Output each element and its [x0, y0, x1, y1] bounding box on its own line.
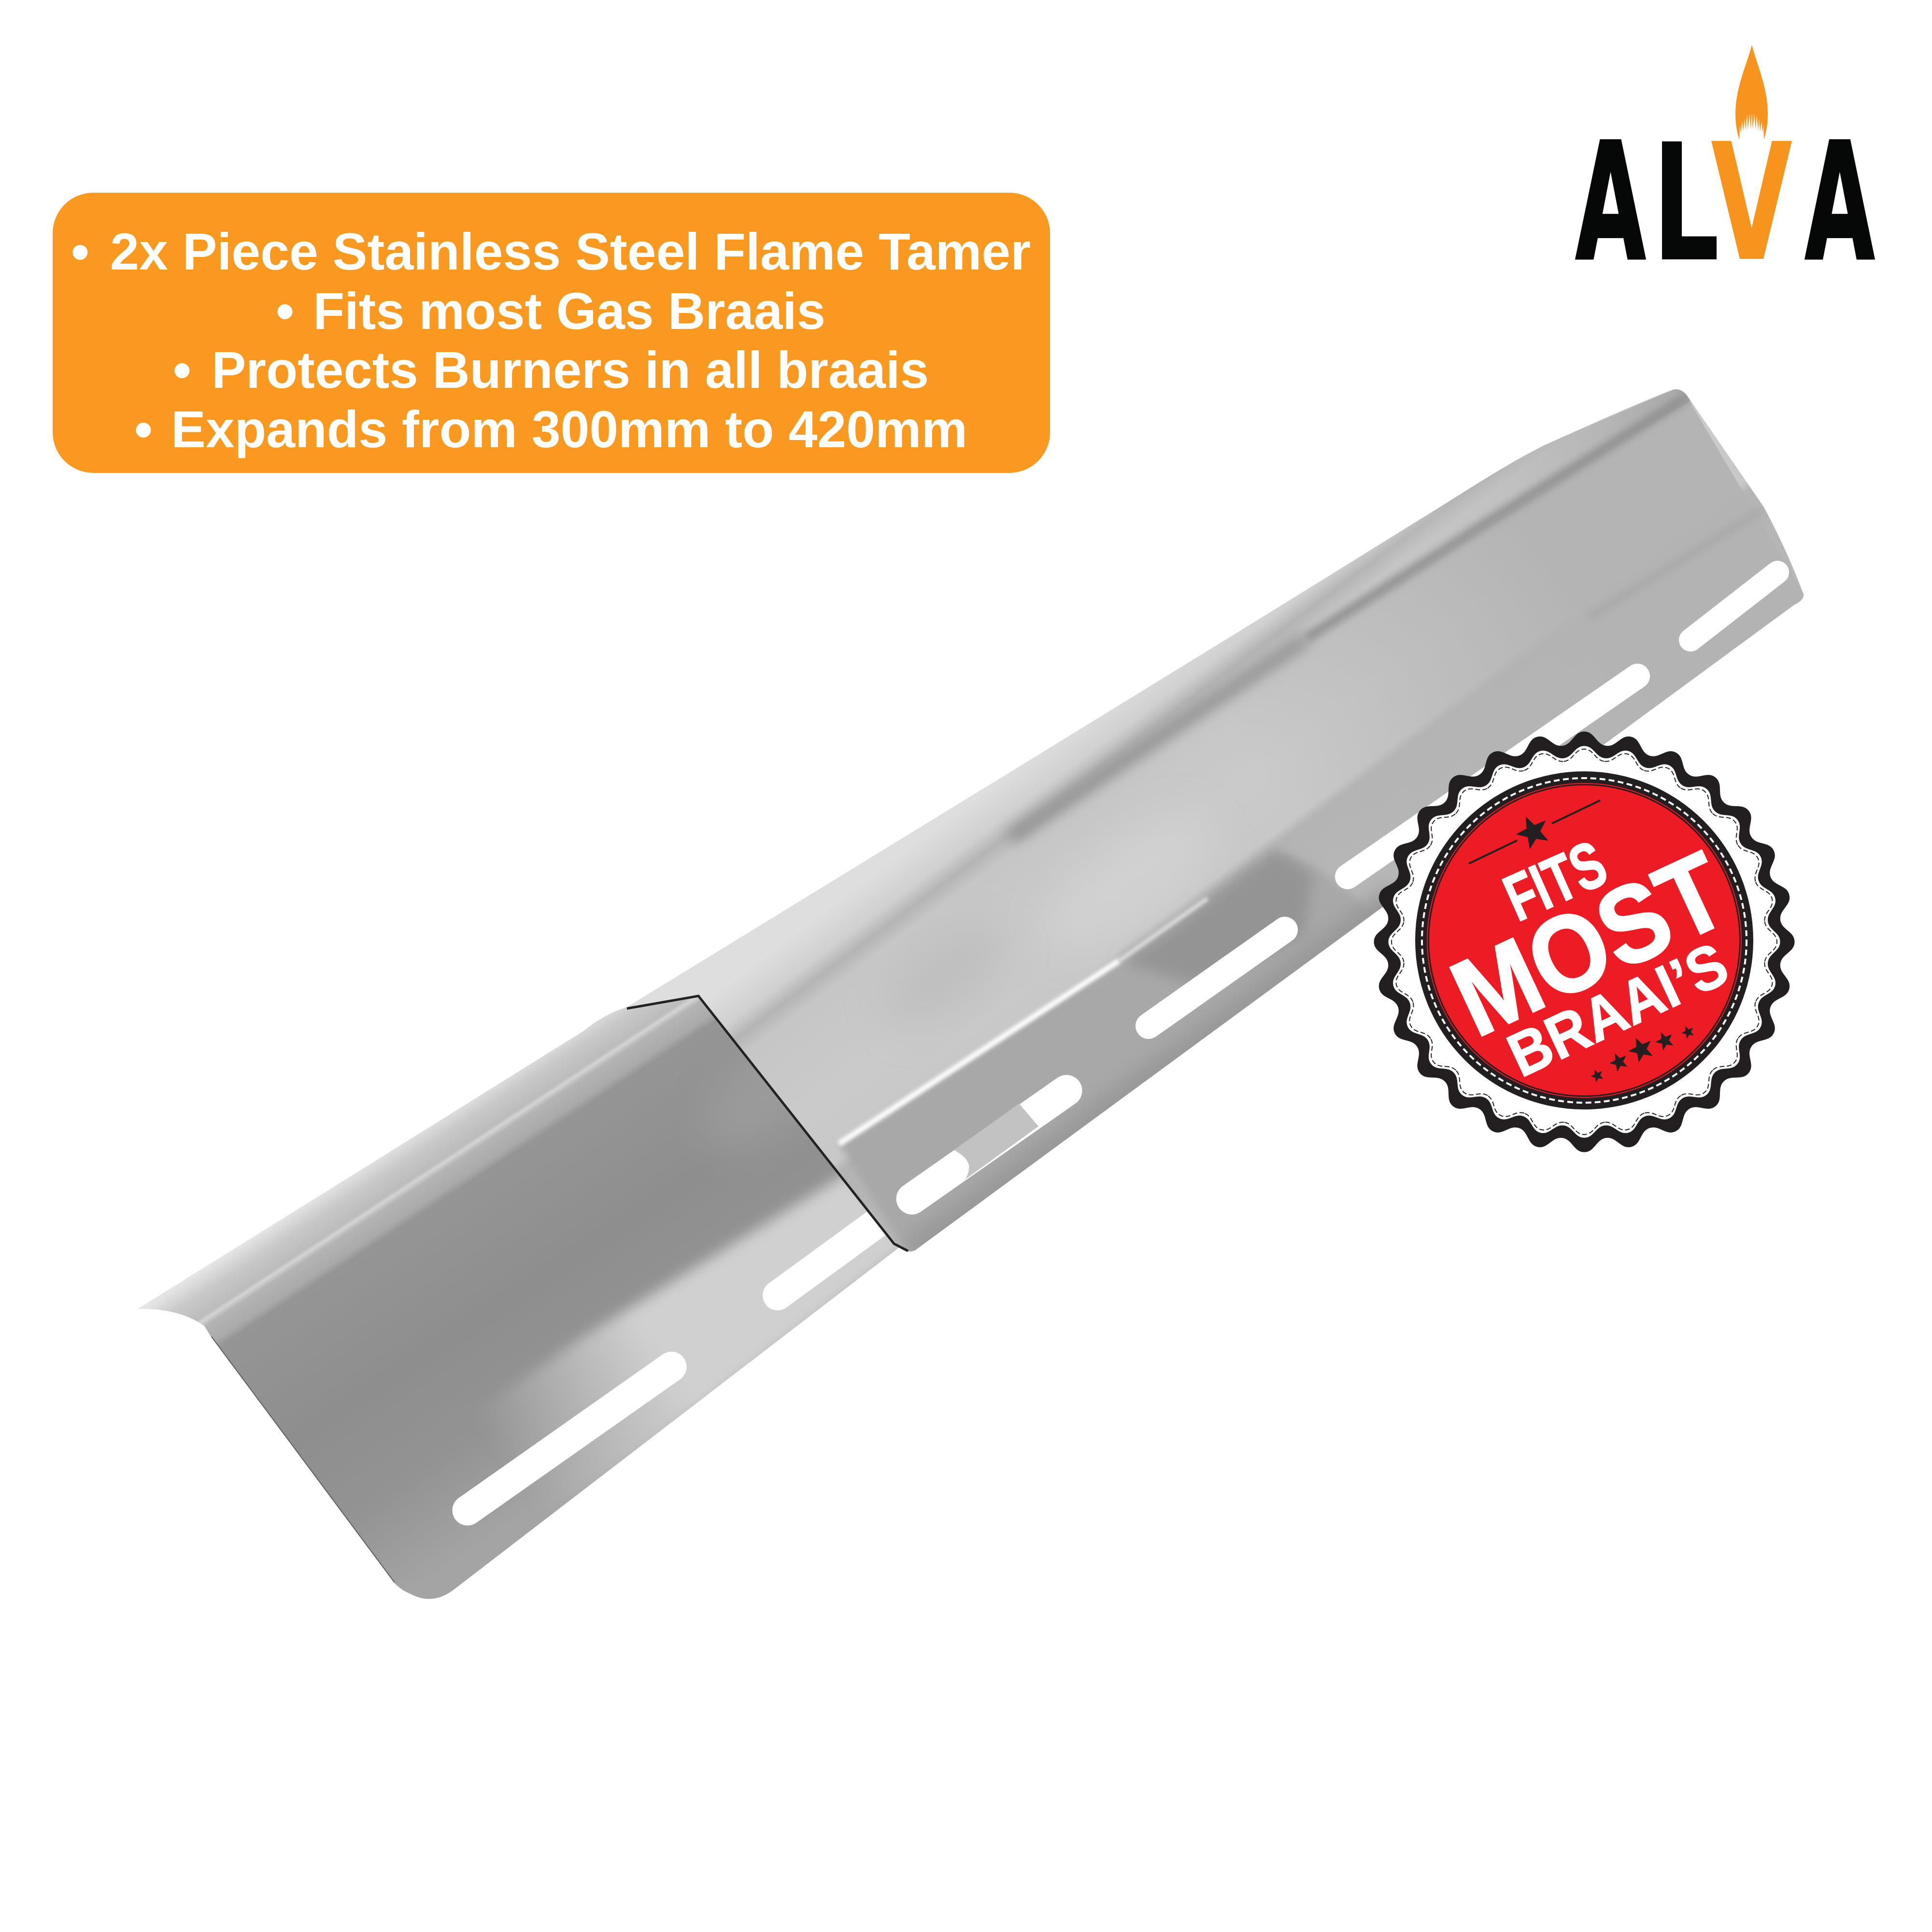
lower tamer section	[138, 996, 908, 1599]
scalloped outer edge	[1374, 732, 1794, 1152]
upper slots	[912, 572, 1777, 1199]
product: stainless steel flame tamer	[138, 386, 1806, 1599]
logo wordmark: A	[1576, 109, 1646, 297]
feature list text: •	[173, 341, 191, 399]
upper tamer section	[627, 386, 1806, 1256]
feature list text: •	[134, 400, 153, 458]
logo: ALVA	[1576, 45, 1875, 298]
lower slot	[468, 1367, 671, 1510]
badge text: BRAAI'S: BRAAI’S	[1497, 929, 1738, 1090]
divider lines	[1469, 800, 1600, 864]
panel background	[53, 193, 1050, 473]
feature list text: Fits most Gas Braais	[313, 282, 825, 340]
feature list text: •	[276, 282, 294, 340]
lower section seen through slot	[954, 1104, 1038, 1179]
icon: five bottom stars	[1589, 1023, 1696, 1083]
overlap seam	[627, 996, 908, 1251]
logo wordmark: V	[1711, 109, 1793, 298]
badge text: FITS: FITS	[1493, 826, 1617, 935]
logo wordmark	[1576, 109, 1875, 298]
feature list text: Protects Burners in all braais	[212, 341, 929, 399]
lower slot under overlap	[778, 1200, 908, 1295]
badge text: MOST: MOST	[1434, 828, 1744, 1060]
feature list text: 2x Piece Stainless Steel Flame Tamer	[110, 222, 1031, 281]
logo wordmark: L	[1652, 110, 1719, 298]
icon: top star	[1511, 810, 1554, 852]
logo wordmark: A	[1805, 109, 1875, 297]
feature list text	[71, 222, 1031, 458]
icon: flame	[1735, 45, 1768, 140]
feature list text: •	[71, 222, 89, 281]
feature list text: Expands from 300mm to 420mm	[171, 400, 967, 458]
badge: fits most braais	[1374, 732, 1794, 1152]
black ring with stitching	[1415, 771, 1753, 1109]
panel: product features	[53, 193, 1050, 473]
red centre	[1429, 785, 1739, 1095]
